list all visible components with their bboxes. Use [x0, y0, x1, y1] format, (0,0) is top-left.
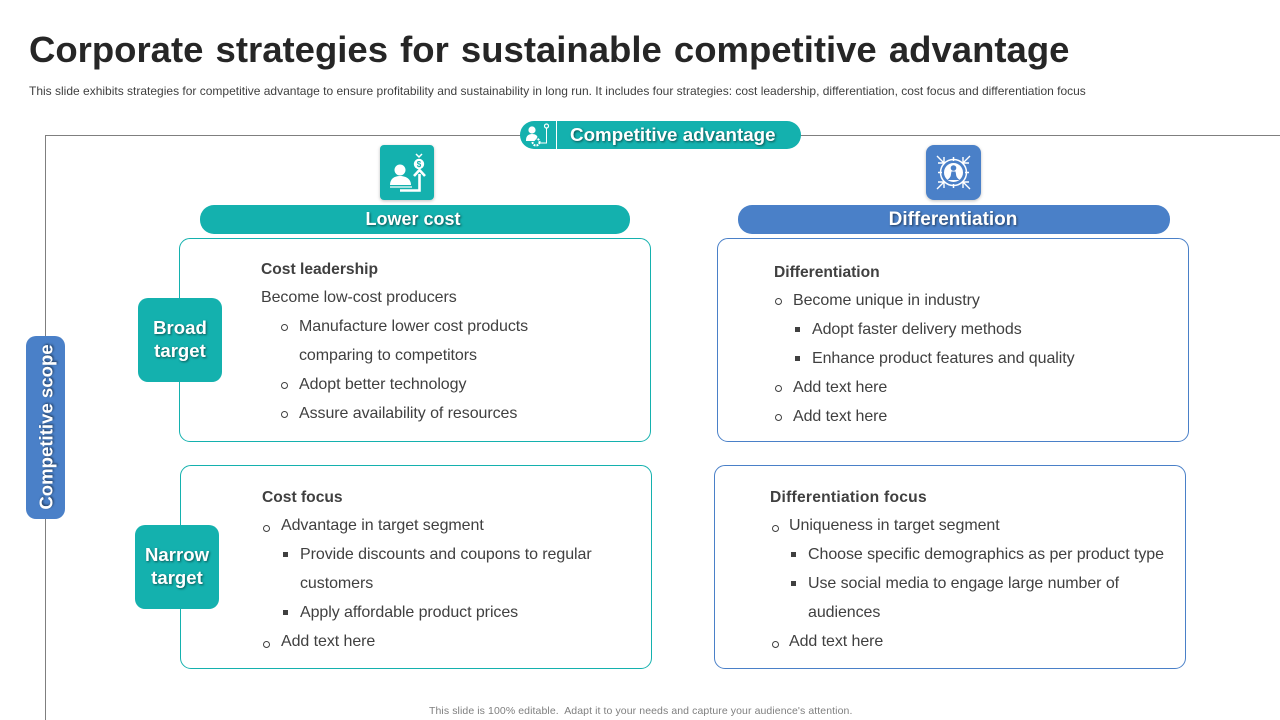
bullet	[281, 382, 288, 389]
icon: person with gear and pin	[526, 123, 550, 146]
bullet text: Adopt faster delivery methods	[812, 321, 1022, 338]
column header: differentiation	[738, 205, 1170, 234]
bullet	[795, 356, 800, 361]
bullet	[281, 411, 288, 418]
heading: Cost focus	[262, 489, 343, 506]
bullet	[775, 385, 782, 392]
panel: cost leadership	[179, 238, 651, 442]
column header: differentiation: Differentiation	[889, 209, 1017, 230]
title: Corporate strategies for sustainable competitive advantage	[29, 29, 1069, 70]
panel: differentiation	[717, 238, 1189, 442]
bullet	[772, 641, 779, 648]
subtitle: This slide exhibits strategies for competitive advantage to ensure profitability and sustainability in long run. It includes four strategies: cost leadership, differentiation, cost focus and differentiation focus	[29, 84, 1086, 98]
column header: lower cost: Lower cost	[365, 209, 461, 229]
divider line in pill	[556, 121, 557, 149]
bullet continuation: audiences	[808, 604, 880, 621]
bullet text: Advantage in target segment	[281, 517, 484, 534]
panel: differentiation focus	[714, 465, 1186, 669]
bullet	[263, 641, 270, 648]
bullet text: Apply affordable product prices	[300, 604, 518, 621]
bullet text: Add text here	[793, 408, 887, 425]
bullet	[791, 552, 796, 557]
bullet text: Manufacture lower cost products	[299, 318, 528, 335]
bullet text: Use social media to engage large number of	[808, 575, 1119, 592]
footer note: This slide is 100% editable. Adapt it to your needs and capture your audience's attention.	[429, 705, 852, 717]
bullet	[795, 327, 800, 332]
icon: lower cost: $	[417, 160, 422, 169]
row label: narrow target: Narrow	[145, 544, 209, 565]
row label: broad target: Broad	[153, 317, 207, 338]
bullet text: Enhance product features and quality	[812, 350, 1075, 367]
bullet	[772, 525, 779, 532]
panel: cost focus	[180, 465, 652, 669]
column header: lower cost	[200, 205, 630, 234]
bullet text: Uniqueness in target segment	[789, 517, 1000, 534]
heading: Differentiation focus	[770, 489, 927, 506]
bullet	[283, 552, 288, 557]
bullet	[791, 581, 796, 586]
icon: differentiation	[926, 145, 981, 200]
body text: Become low-cost producers	[261, 289, 457, 306]
row label: narrow target: target	[151, 567, 203, 588]
rotated label: Competitive scope	[35, 344, 56, 510]
bullet text: Adopt better technology	[299, 376, 466, 393]
bullet text: Add text here	[793, 379, 887, 396]
row axis label: competitive scope	[26, 336, 65, 519]
heading: Cost leadership	[261, 261, 378, 278]
bullet text: Choose specific demographics as per product type	[808, 546, 1164, 563]
bullet text: Become unique in industry	[793, 292, 980, 309]
bullet continuation: customers	[300, 575, 373, 592]
row label: broad target: target	[154, 340, 206, 361]
bullet	[775, 414, 782, 421]
bullet	[775, 298, 782, 305]
row label: broad target	[138, 298, 222, 382]
bullet	[281, 324, 288, 331]
row label: narrow target	[135, 525, 219, 609]
heading: Differentiation	[774, 264, 880, 281]
bullet text: Provide discounts and coupons to regular	[300, 546, 592, 563]
icon: lower cost	[380, 145, 434, 200]
bullet text: Assure availability of resources	[299, 405, 517, 422]
bullet	[283, 610, 288, 615]
pill label: Competitive advantage	[570, 124, 776, 145]
bullet text: Add text here	[789, 633, 883, 650]
bullet continuation: comparing to competitors	[299, 347, 477, 364]
bullet text: Add text here	[281, 633, 375, 650]
bullet	[263, 525, 270, 532]
header: competitive advantage pill	[520, 121, 801, 149]
